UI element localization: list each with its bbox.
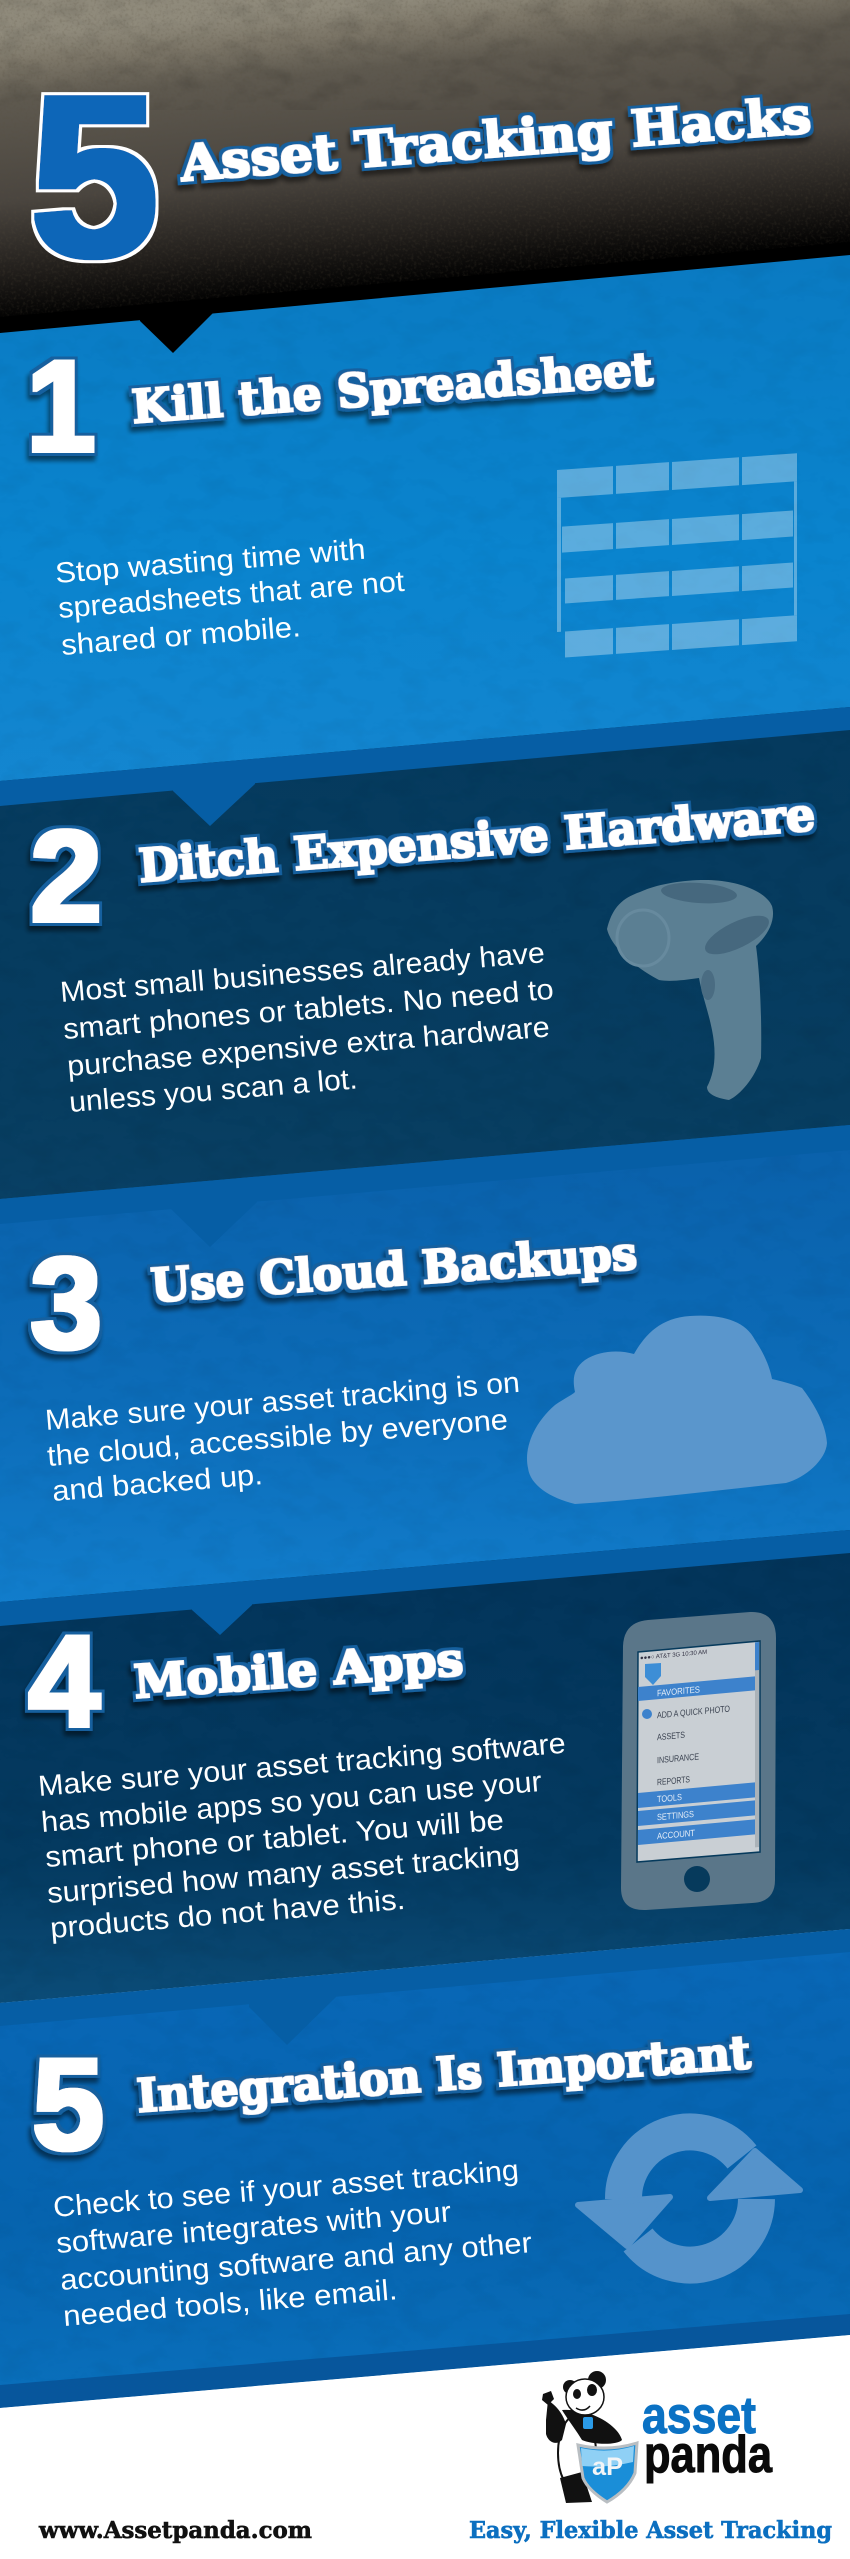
- body text: [37, 1728, 567, 1945]
- panel: 5 Integration Is Important: [0, 1929, 850, 2408]
- body text: smart phones or tablets. No need to: [62, 974, 555, 1046]
- icon: phone with app: REPORTS: [657, 1774, 690, 1787]
- number 5: 5: [32, 2031, 104, 2177]
- icon: phone with app: ●●●○ AT&T 3G 10:30 AM: [640, 1650, 707, 1662]
- body text: products do not have this.: [49, 1884, 406, 1945]
- icon: phone with app: ASSETS: [657, 1730, 685, 1742]
- body text: Most small businesses already have: [59, 937, 546, 1009]
- icon: phone with app: ADD A QUICK PHOTO: [657, 1704, 730, 1720]
- title: Asset Tracking Hacks: Asset Tracking Hacks: [177, 86, 813, 193]
- heading numeral: 5: 5: [30, 50, 159, 304]
- divider band: [0, 707, 850, 806]
- wordmark: panda: panda: [644, 2426, 773, 2484]
- body text: needed tools, like email.: [62, 2274, 398, 2333]
- body text: Stop wasting time with: [54, 534, 367, 590]
- number 1: 1: [26, 333, 96, 479]
- body text: Make sure your asset tracking is on: [44, 1367, 521, 1437]
- divider band: [0, 1929, 850, 2026]
- panel: 4 Mobile Apps: [0, 1530, 850, 2003]
- icon: phone with app: FAVORITES: [657, 1684, 700, 1698]
- icon: spreadsheet: [557, 453, 797, 658]
- body text: unless you scan a lot.: [68, 1063, 359, 1119]
- body text: software integrates with your: [55, 2196, 453, 2260]
- number 4: 4: [28, 1608, 100, 1754]
- body text: shared or mobile.: [60, 611, 302, 662]
- divider band: [0, 1530, 850, 1626]
- panel: header background: [0, 0, 850, 345]
- icon: cloud: [527, 1316, 827, 1504]
- body text: [54, 534, 405, 662]
- bottom band: [0, 2314, 850, 2408]
- panel: 2 Ditch Expensive Hardware: [0, 707, 850, 1199]
- body text: surprised how many asset tracking: [46, 1839, 521, 1910]
- body text: and backed up.: [51, 1459, 264, 1508]
- heading: Integration Is Important: [135, 2025, 753, 2123]
- heading: Use Cloud Backups: [149, 1226, 639, 1313]
- heading: Kill the Spreadsheet: [130, 342, 655, 434]
- notch: [173, 770, 255, 826]
- icon: refresh arrows: [578, 2132, 800, 2265]
- number 3: 3: [30, 1230, 102, 1376]
- panel: footer background: [0, 2335, 850, 2559]
- body text: smart phone or tablet. You will be: [44, 1804, 505, 1874]
- body text: [59, 937, 555, 1119]
- body text: accounting software and any other: [59, 2227, 533, 2297]
- notch: [249, 1985, 336, 2045]
- footer: website: www.Assetpanda.com: [38, 2517, 312, 2544]
- divider band: [0, 1125, 850, 1224]
- body text: [52, 2155, 533, 2333]
- notch: [140, 300, 213, 353]
- logo: Asset Panda: [542, 2371, 773, 2503]
- shield: aP: [592, 2453, 623, 2481]
- icon: phone with app: INSURANCE: [657, 1751, 699, 1765]
- body text: the cloud, accessible by everyone: [46, 1404, 509, 1473]
- icon: barcode scanner: [607, 880, 774, 1100]
- body text: has mobile apps so you can use your: [40, 1766, 543, 1839]
- body text: Make sure your asset tracking software: [37, 1728, 567, 1803]
- heading: Mobile Apps: [132, 1632, 465, 1709]
- panda mascot: [542, 2371, 622, 2503]
- heading: Ditch Expensive Hardware: [137, 787, 817, 893]
- body text: spreadsheets that are not: [57, 566, 405, 625]
- notch: [192, 1594, 252, 1635]
- icon: phone with app: [621, 1612, 776, 1910]
- icon: phone with app: SETTINGS: [657, 1809, 694, 1822]
- notch: [171, 1190, 257, 1247]
- icon: phone with app: ACCOUNT: [657, 1828, 695, 1841]
- wordmark: asset: asset: [642, 2387, 756, 2445]
- body text: Check to see if your asset tracking: [52, 2155, 520, 2224]
- panel: 3 Use Cloud Backups: [0, 1125, 850, 1626]
- footer: tagline: Easy, Flexible Asset Tracking: [469, 2517, 832, 2544]
- number 2: 2: [30, 803, 102, 949]
- icon: phone with app: TOOLS: [657, 1792, 682, 1804]
- shield: [578, 2443, 637, 2502]
- panel: 1 Kill the Spreadsheet: [0, 255, 850, 781]
- body text: [44, 1367, 521, 1508]
- body text: purchase expensive extra hardware: [66, 1011, 551, 1083]
